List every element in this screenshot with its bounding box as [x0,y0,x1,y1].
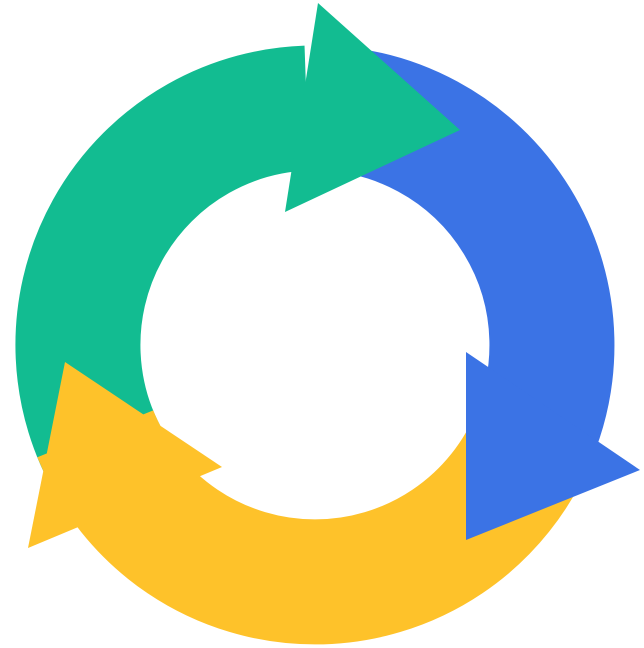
arrowhead: green [285,3,460,212]
arc: blue segment [323,108,552,445]
arc: yellow segment [95,434,535,582]
arrowhead: yellow [28,362,222,548]
arc: green segment [78,108,307,463]
arrowhead: blue [466,352,640,540]
